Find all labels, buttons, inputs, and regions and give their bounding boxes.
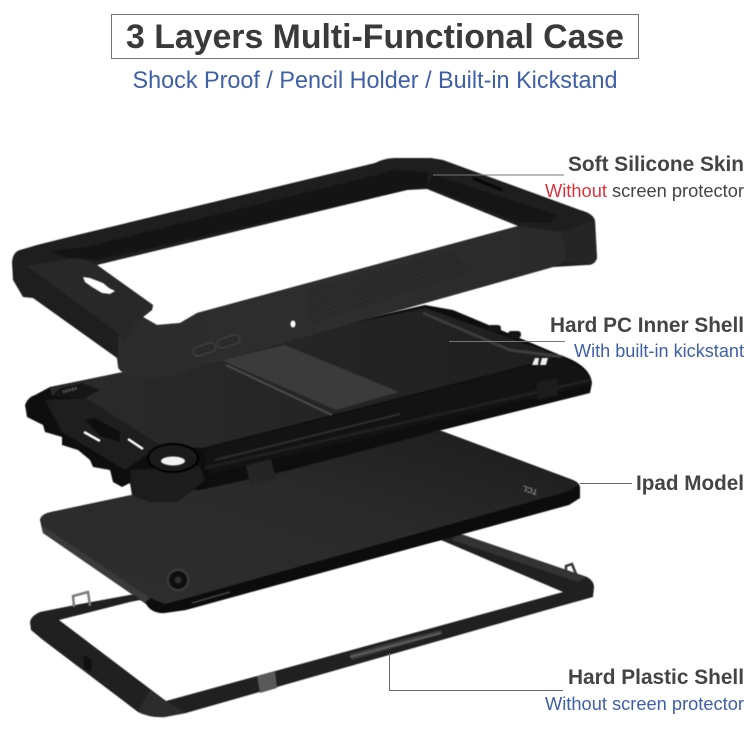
front side face <box>118 226 567 378</box>
label: hard plastic shell: Hard Plastic Shell <box>568 666 744 689</box>
side channel <box>45 398 160 470</box>
brand mark: TCL <box>521 483 539 497</box>
hard plastic shell frame <box>30 533 594 717</box>
subtitle: Shock Proof / Pencil Holder / Built-in Kickstand <box>132 67 618 94</box>
white slot <box>83 277 115 294</box>
kickstand <box>221 345 399 410</box>
side slots <box>84 432 100 441</box>
top rim right <box>427 175 558 223</box>
side buttons <box>192 333 241 357</box>
iPad model tablet <box>40 430 580 613</box>
hard PC inner shell <box>25 305 592 502</box>
top rim long groove <box>48 170 428 260</box>
label: iPad model: Ipad Model <box>636 472 744 495</box>
lens ring <box>148 444 198 472</box>
leader line: plastic shell <box>390 653 563 690</box>
leader line: inner shell <box>449 340 565 342</box>
leader line: tablet <box>580 482 632 484</box>
camera <box>166 568 190 592</box>
title box: 3 Layers Multi-Functional Case <box>126 18 624 56</box>
raised ridge <box>423 313 563 357</box>
label: soft silicone skin: Soft Silicone Skin <box>568 153 744 176</box>
lower corner <box>130 466 205 502</box>
label: hard PC inner shell <box>550 314 744 361</box>
pin hole <box>290 320 296 328</box>
label: hard PC inner shell: With built-in kickstant <box>574 341 744 361</box>
label: soft silicone skin <box>545 153 744 201</box>
leader line: silicone skin <box>433 174 564 176</box>
back face <box>50 308 560 448</box>
label: hard PC inner shell: Hard PC Inner Shell <box>550 314 744 337</box>
grip texture <box>308 250 470 325</box>
left top face <box>27 257 153 343</box>
label: hard plastic shell <box>545 666 744 714</box>
label: soft silicone skin: Without screen protector <box>545 181 744 201</box>
right end <box>562 220 597 265</box>
lower rim <box>203 357 590 474</box>
soft silicone skin frame <box>12 158 597 378</box>
label: hard plastic shell: Without screen protector <box>545 694 744 714</box>
